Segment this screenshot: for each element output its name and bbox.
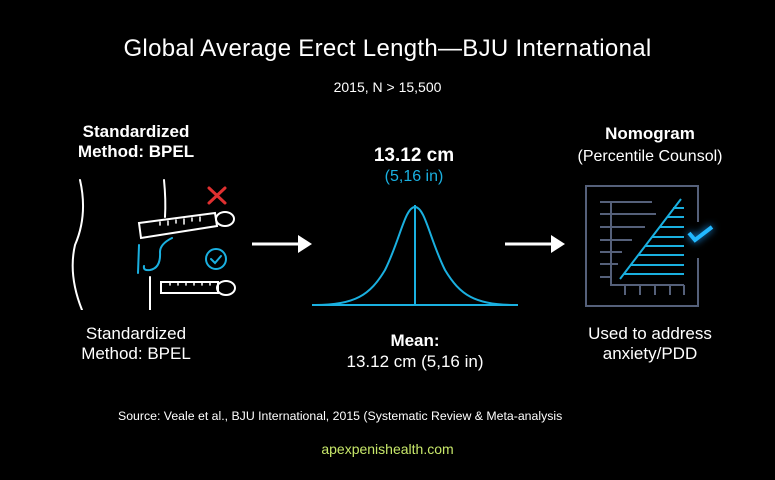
right heading bbox=[578, 124, 722, 165]
source note: Source: Veale et al., BJU International, 2015 (Systematic Review & Meta-analysis bbox=[118, 409, 562, 423]
icon: nomogram bbox=[585, 185, 718, 307]
left heading bbox=[78, 122, 194, 161]
left heading: Method: BPEL bbox=[78, 142, 194, 161]
right caption: Used to address bbox=[588, 324, 712, 343]
right caption bbox=[588, 324, 712, 363]
right heading: (Percentile Counsol) bbox=[578, 148, 722, 165]
right caption: anxiety/PDD bbox=[603, 344, 697, 363]
left caption: Standardized bbox=[86, 324, 186, 343]
website: apexpenishealth.com bbox=[321, 441, 454, 457]
left heading: Standardized bbox=[83, 122, 189, 141]
center subheading: (5,16 in) bbox=[385, 168, 443, 185]
right heading: Nomogram bbox=[605, 124, 695, 143]
center caption bbox=[346, 331, 484, 371]
left caption: Method: BPEL bbox=[81, 344, 191, 363]
icon: BPEL measurement bbox=[72, 179, 236, 310]
title: Global Average Erect Length—BJU International bbox=[123, 35, 652, 62]
center caption: 13.12 cm (5,16 in) bbox=[346, 352, 484, 371]
arrow 1 bbox=[252, 235, 312, 253]
arrow 2 bbox=[505, 235, 565, 253]
subtitle: 2015, N > 15,500 bbox=[334, 79, 441, 95]
bell curve chart bbox=[312, 205, 518, 306]
center heading: 13.12 cm bbox=[374, 145, 454, 166]
left caption bbox=[81, 324, 191, 363]
center caption: Mean: bbox=[390, 331, 440, 350]
